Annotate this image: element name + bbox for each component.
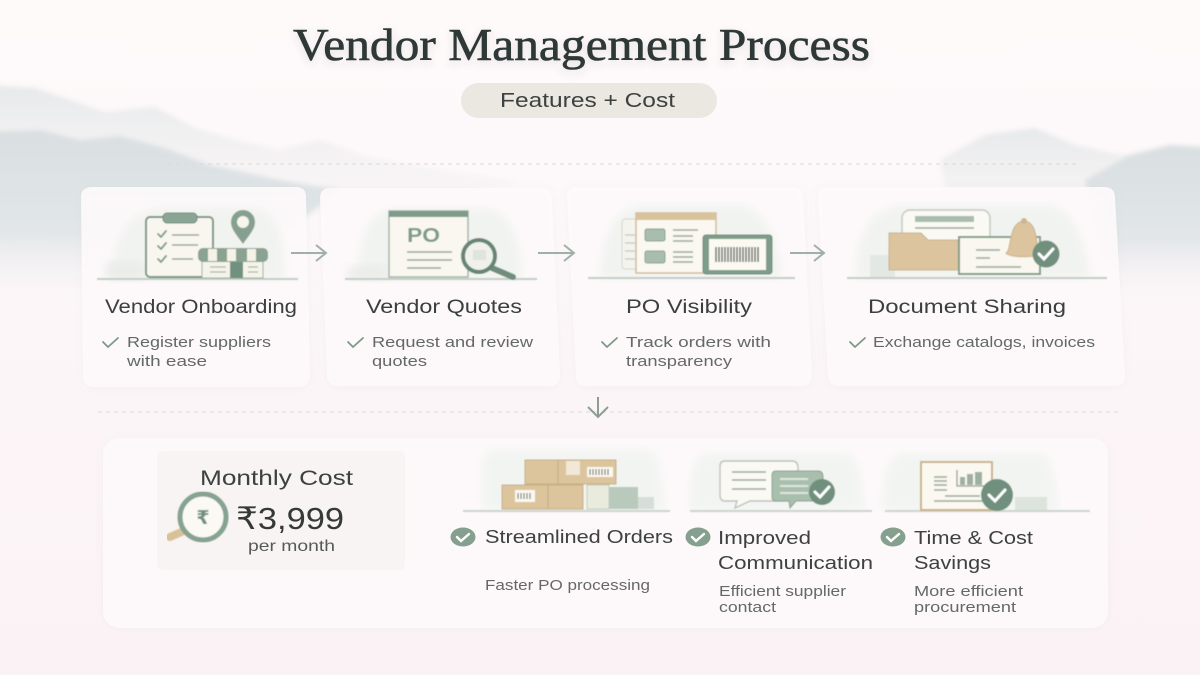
benefit text	[914, 583, 1024, 616]
feature text: quotes	[372, 353, 427, 370]
icon: check badge	[450, 528, 476, 546]
panel: vendor onboarding	[81, 187, 310, 387]
feature text: with ease	[126, 353, 207, 370]
price: ₹3,999	[236, 501, 344, 536]
benefit heading: Time & Cost	[914, 527, 1033, 548]
feature text: transparency	[626, 353, 733, 370]
feature text: Request and review	[372, 334, 533, 351]
arrow	[538, 245, 574, 261]
heading: Monthly Cost	[200, 467, 353, 490]
arrow	[790, 245, 824, 261]
icon: folder, document and bell	[847, 205, 1107, 278]
icon: PO window and barcode	[588, 205, 795, 278]
benefit heading	[914, 527, 1033, 573]
panel: vendor quotes	[320, 188, 560, 386]
icon: check	[103, 338, 118, 347]
icon: speech bubbles	[690, 453, 872, 511]
icon: stacked boxes	[463, 450, 670, 511]
benefit text: More efficient	[914, 583, 1024, 600]
benefit text	[719, 583, 846, 616]
benefit heading: Streamlined Orders	[485, 526, 673, 547]
icon: PO document and magnifier	[345, 208, 537, 279]
benefit text: contact	[719, 599, 777, 616]
feature text	[372, 334, 533, 370]
panel: benefits and cost	[103, 438, 1108, 628]
feature text: Track orders with	[626, 334, 771, 351]
panel: PO visibility	[567, 187, 812, 386]
subtitle pill	[461, 83, 717, 118]
icon: clipboard and store	[97, 208, 298, 279]
title: Vendor Management Process	[293, 19, 870, 70]
benefit heading: Communication	[718, 552, 873, 573]
icon: rupee magnifier	[170, 494, 226, 540]
benefit text: Efficient supplier	[719, 583, 846, 600]
icon: rupee magnifier: ₹	[196, 507, 210, 529]
price caption: per month	[248, 538, 335, 555]
subtitle pill: Features + Cost	[500, 90, 676, 112]
feature text	[626, 334, 771, 370]
heading: Vendor Quotes	[366, 297, 522, 318]
benefit: improved communication	[686, 453, 873, 616]
benefit: time and cost savings	[880, 453, 1090, 616]
icon: check badge	[880, 528, 906, 546]
heading: Vendor Onboarding	[105, 297, 297, 318]
misty mountains	[0, 85, 1200, 300]
icon: check	[602, 338, 617, 347]
benefit: streamlined orders	[450, 450, 673, 594]
benefit heading: Improved	[718, 527, 811, 548]
panel: monthly cost	[157, 451, 405, 570]
feature text: Exchange catalogs, invoices	[873, 334, 1095, 351]
panel: document sharing	[818, 187, 1125, 386]
arrow	[291, 245, 326, 261]
heading: Document Sharing	[868, 297, 1066, 318]
icon: PO document and magnifier: PO	[407, 225, 440, 247]
feature text: Register suppliers	[127, 334, 271, 351]
icon: check badge	[686, 528, 710, 546]
benefit text: procurement	[914, 599, 1017, 616]
icon: check	[850, 338, 865, 347]
icon: chart and check	[882, 453, 1090, 511]
benefit text: Faster PO processing	[485, 577, 650, 594]
arrow down	[588, 397, 608, 417]
icon: check	[348, 338, 363, 347]
benefit heading	[718, 527, 873, 573]
benefit heading: Savings	[914, 552, 991, 573]
feature text	[126, 334, 271, 370]
heading: PO Visibility	[626, 297, 753, 318]
